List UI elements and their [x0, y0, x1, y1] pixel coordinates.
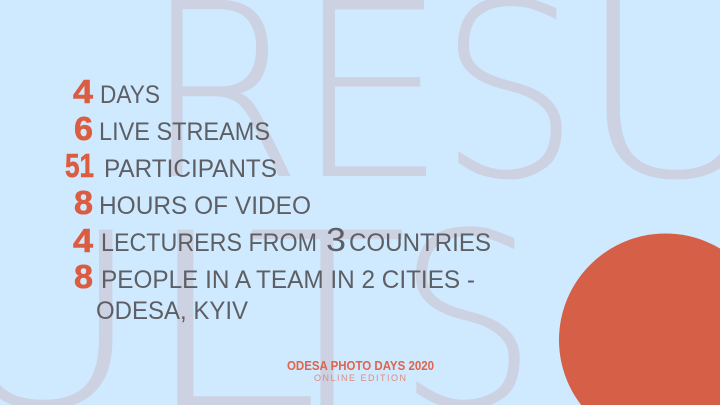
- stat: 8 people in a team in 2 cities: [74, 258, 475, 325]
- stat: 4 days: DAYS: [100, 81, 160, 109]
- stat: 8 hours of video: 8: [74, 184, 93, 221]
- stat: 4 days: 4: [73, 73, 94, 110]
- stat: 4 days: [73, 73, 160, 110]
- stat: 8 hours of video: [74, 184, 311, 221]
- stat: 4 lecturers from 3 countries: 4: [73, 222, 94, 259]
- giant background word: ULTS: [0, 182, 538, 405]
- footer: event name: ODESA PHOTO DAYS 2020: [287, 359, 434, 373]
- stat: 4 lecturers from 3 countries: [73, 221, 491, 259]
- stat: 4 lecturers from 3 countries: COUNTRIES: [349, 229, 491, 257]
- stat: 51 participants: PARTICIPANTS: [104, 155, 277, 183]
- stat: 4 lecturers from 3 countries: 3: [326, 221, 346, 258]
- stat: 8 people in a team in 2 cities: ODESA, KYIV: [96, 297, 248, 325]
- stat: 6 live streams: LIVE STREAMS: [99, 118, 270, 146]
- footer: edition: ONLINE EDITION: [314, 373, 406, 383]
- stat: 8 hours of video: HOURS OF VIDEO: [99, 192, 311, 220]
- stat: 4 lecturers from 3 countries: LECTURERS FROM: [101, 229, 317, 257]
- stat: 51 participants: [65, 147, 277, 184]
- decorative orange circle: [559, 234, 720, 405]
- stat: 6 live streams: 6: [74, 110, 93, 147]
- stat: 51 participants: 51: [65, 147, 94, 184]
- stat: 6 live streams: [74, 110, 270, 147]
- stat: 8 people in a team in 2 cities: 8: [74, 258, 93, 295]
- giant background word: RESU: [143, 0, 720, 234]
- stat: 8 people in a team in 2 cities: PEOPLE IN A TEAM IN 2 CITIES -: [101, 266, 475, 294]
